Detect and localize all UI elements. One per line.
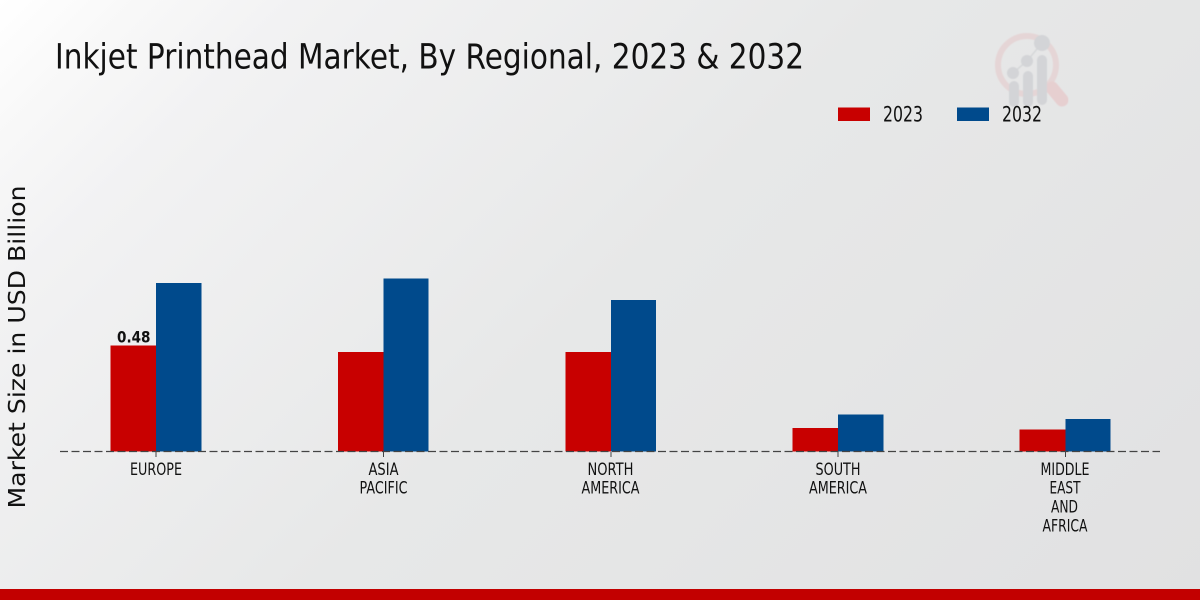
icon: watermark logo [998,35,1062,107]
legend: 2023: 2023 [883,102,923,126]
label: Middle East and Africa: AFRICA [1042,516,1088,535]
label: Asia Pacific [360,460,408,497]
legend [838,102,1042,126]
label: Middle East and Africa [1040,460,1090,535]
label: North America [582,460,640,497]
legend: 2032 [957,102,1042,126]
label: Middle East and Africa: EAST [1050,478,1081,497]
label: North America: AMERICA [582,478,640,497]
category labels [130,460,1090,535]
label: Middle East and Africa: AND [1051,497,1078,516]
label: South America: AMERICA [809,478,868,497]
bars: Middle East and Africa [1020,419,1110,452]
bar chart [60,278,1160,457]
axis baseline [60,450,1160,452]
title: Inkjet Printhead Market, By Regional, 2023 & 2032 [55,38,804,78]
value label: 0.48 [117,328,150,347]
bars: South America [792,414,884,452]
label: Middle East and Africa: MIDDLE [1040,460,1090,479]
footer bar [0,589,1200,600]
label: Asia Pacific: ASIA [368,460,399,479]
label: South America [809,460,868,497]
bars: North America [566,300,656,452]
y axis label: Market Size in USD Billion [5,186,31,508]
legend: 2023 [838,102,923,126]
label: North America: NORTH [588,460,634,479]
bars: Asia Pacific [338,278,428,452]
label: Europe: EUROPE [130,460,182,479]
label: Asia Pacific: PACIFIC [360,478,408,497]
label: South America: SOUTH [816,460,860,479]
bars: Europe [110,283,202,452]
legend: 2032: 2032 [1002,102,1042,126]
